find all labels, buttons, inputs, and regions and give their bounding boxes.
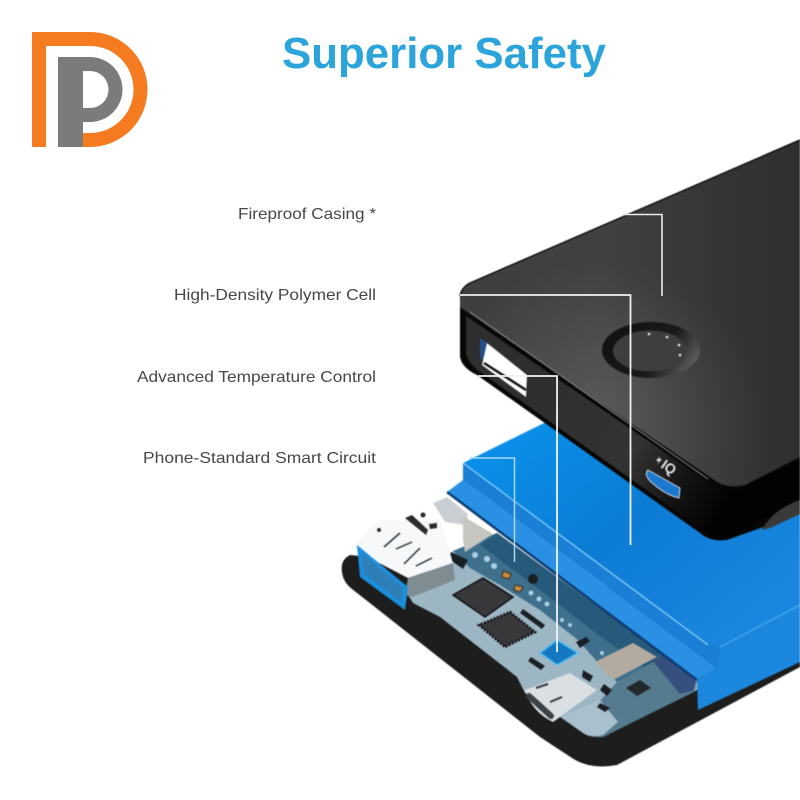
USB-A opening: [362, 553, 403, 602]
board mid band: [453, 533, 697, 705]
rear wall: [463, 516, 493, 552]
line: fireproof casing: [623, 214, 662, 296]
solder pads: [472, 552, 604, 655]
IQ mark: IQ: [658, 456, 680, 478]
casing top surface: [460, 140, 800, 486]
silver module: [595, 643, 657, 680]
battery highlight edge: [463, 463, 708, 645]
board lower light tip: [562, 700, 618, 736]
bottom tray: [342, 555, 800, 766]
chip: small controller: [626, 680, 651, 696]
battery cell: [447, 300, 800, 710]
small components: [449, 552, 612, 712]
board dark band near battery: [480, 533, 697, 688]
feature labels: [137, 206, 377, 467]
logo: orange D: [32, 32, 148, 147]
board base: [405, 533, 700, 737]
USB-C port: [646, 470, 680, 498]
casing corner patch: [762, 500, 800, 530]
rear contact fins: [433, 497, 468, 525]
USB-C connector: [525, 673, 597, 722]
port blue interior: [480, 338, 487, 362]
battery lower block: [697, 605, 800, 710]
capacitors: [502, 571, 523, 592]
port inner bar: [484, 363, 526, 390]
USB-C port with IQ mark: [646, 456, 680, 498]
USB-A slots: [384, 533, 432, 566]
USB-C opening: [529, 696, 551, 716]
chip: temperature sensor: [540, 640, 578, 665]
exploded power bank illustration: [342, 140, 800, 766]
USB-C housing: [525, 673, 597, 722]
title: Superior Safety: [282, 29, 607, 78]
board right section: [583, 658, 697, 737]
USB-A shell side: [405, 563, 455, 597]
LED indicators: [648, 333, 681, 356]
battery rear edge highlight: [720, 605, 800, 647]
battery top: [463, 300, 800, 647]
USB-A blue frame: [357, 545, 408, 610]
label: smart circuit: Phone-Standard Smart Circuit: [143, 450, 377, 467]
line: smart circuit: [470, 458, 514, 562]
port white opening: [482, 343, 527, 397]
line: polymer cell: [460, 295, 630, 545]
logo: DP monogram: [32, 32, 148, 147]
ribbon traces: [652, 654, 697, 694]
label: polymer cell: High-Density Polymer Cell: [174, 287, 376, 304]
chip: processor 1: [453, 578, 513, 617]
casing rear edge: [460, 140, 800, 296]
casing top glow: [460, 140, 800, 486]
casing front seam highlight: [470, 312, 708, 479]
logo: gray P: [58, 57, 122, 147]
power button face: [613, 330, 687, 372]
callout lines: [460, 214, 662, 652]
casing body: [460, 140, 800, 540]
USB-A connector: [350, 512, 455, 610]
battery upper side: [463, 463, 720, 668]
lightning mark: [656, 456, 662, 465]
loose small parts: [377, 512, 437, 535]
USB-A port: [480, 338, 527, 397]
power bank casing: [460, 140, 800, 540]
USB-C slots: [536, 684, 562, 702]
label: temperature control: Advanced Temperature Control: [137, 369, 376, 386]
label: fireproof casing: Fireproof Casing *: [238, 206, 376, 223]
casing front face: [466, 316, 800, 537]
battery lower step: [447, 480, 717, 680]
USB-A shell: [350, 520, 453, 578]
circuit board: [405, 533, 700, 737]
line: temperature control: [478, 376, 557, 652]
power button ring: [602, 322, 700, 378]
battery shadow under strip: [447, 492, 697, 680]
chip: processor 2: [479, 612, 535, 647]
